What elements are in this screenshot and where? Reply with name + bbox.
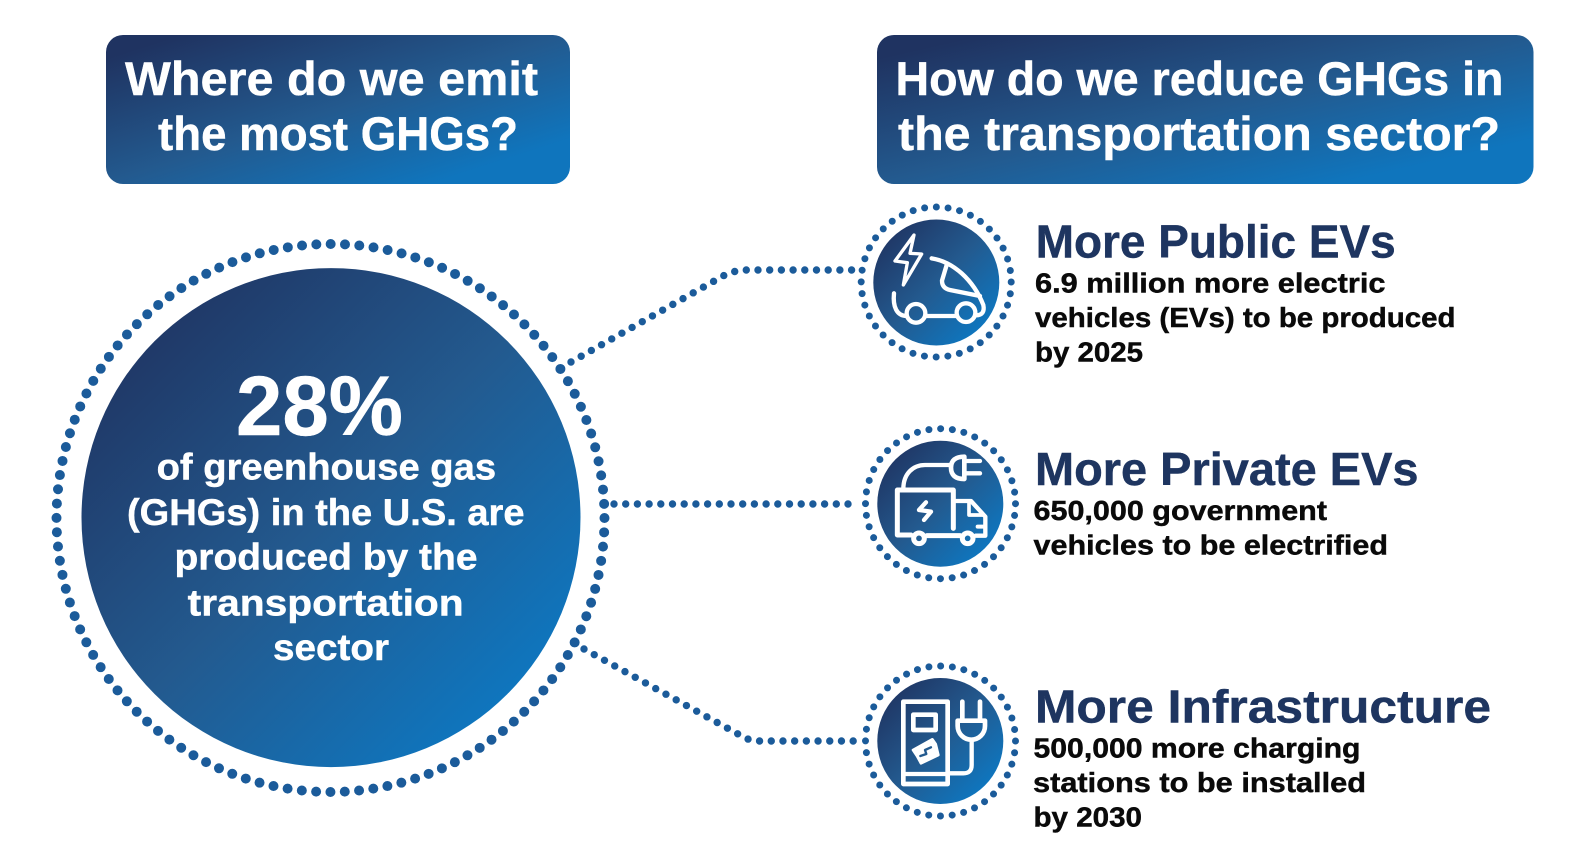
heading: how do we reduce GHGs in the transportation sector bbox=[877, 35, 1534, 184]
panel: 28 percent circle: produced by the bbox=[174, 537, 478, 578]
text: more infrastructure: 500,000 more charging bbox=[1034, 732, 1360, 763]
heading: where do we emit the most GHGs: Where do we emit bbox=[125, 52, 538, 105]
panel: 28 percent circle: sector bbox=[273, 627, 389, 668]
heading: where do we emit the most GHGs bbox=[106, 35, 570, 184]
text: more infrastructure bbox=[1033, 680, 1491, 833]
text: more public EVs: 6.9 million more electric bbox=[1035, 267, 1386, 298]
text: more infrastructure: More Infrastructure bbox=[1035, 680, 1491, 732]
panel: 28 percent circle: transportation bbox=[188, 582, 464, 624]
heading: how do we reduce GHGs in the transportation sector: How do we reduce GHGs in bbox=[896, 52, 1504, 105]
text: more private EVs bbox=[1034, 443, 1418, 560]
heading: where do we emit the most GHGs: the most GHGs? bbox=[158, 107, 518, 160]
text: more public EVs bbox=[1035, 215, 1456, 368]
icon: electric truck badge bbox=[866, 429, 1016, 579]
heading: how do we reduce GHGs in the transportation sector: the transportation sector? bbox=[898, 107, 1500, 160]
panel: 28 percent circle: of greenhouse gas bbox=[157, 447, 496, 488]
panel: 28 percent circle: 28% bbox=[236, 359, 403, 453]
connector: bottom dotted line bbox=[584, 649, 858, 741]
text: more public EVs: vehicles (EVs) to be produced bbox=[1035, 302, 1456, 333]
panel: 28 percent circle: (GHGs) in the U.S. are bbox=[127, 492, 524, 533]
connector: middle dotted line bbox=[614, 500, 856, 508]
text: more private EVs: More Private EVs bbox=[1035, 443, 1418, 495]
text: more private EVs: 650,000 government bbox=[1034, 495, 1327, 526]
text: more public EVs: by 2025 bbox=[1035, 337, 1143, 368]
icon: electric car badge bbox=[861, 207, 1011, 357]
panel: 28 percent circle bbox=[56, 244, 604, 792]
text: more private EVs: vehicles to be electrified bbox=[1034, 529, 1388, 560]
connector: top dotted line bbox=[571, 270, 858, 362]
text: more infrastructure: by 2030 bbox=[1034, 802, 1142, 833]
icon: charging station badge bbox=[866, 666, 1016, 816]
text: more public EVs: More Public EVs bbox=[1036, 215, 1396, 267]
text: more infrastructure: stations to be installed bbox=[1033, 767, 1366, 798]
